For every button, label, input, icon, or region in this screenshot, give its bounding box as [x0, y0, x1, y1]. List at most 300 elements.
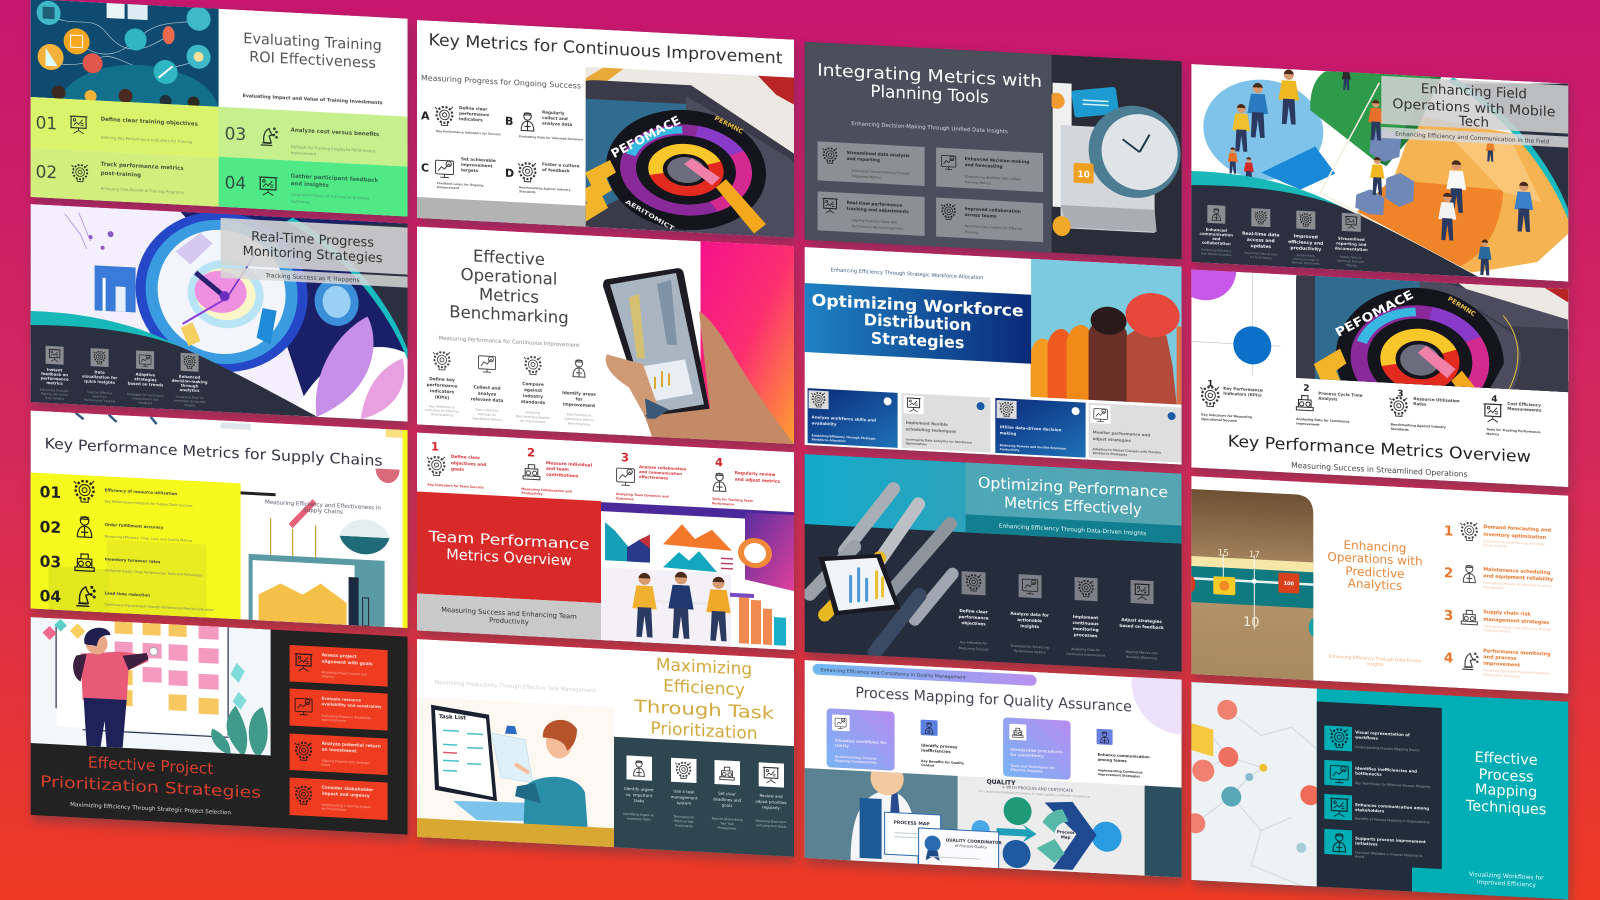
card text: Improvement: [291, 150, 317, 156]
decorative corner circle: [1132, 632, 1232, 737]
text: Analyze potential return: [322, 742, 381, 750]
dark right shape: [293, 218, 408, 354]
text: improvement: [1483, 661, 1521, 669]
icon: [941, 155, 956, 170]
label: insights: [1020, 623, 1040, 629]
text: Visual representation of: [1355, 730, 1410, 737]
text: Performance Metrics Integration: [852, 224, 903, 231]
text: Optimizing Supply Chain Efficiency Through: [1483, 624, 1551, 632]
label: Prioritization: [675, 823, 693, 828]
item D text: Foster a culture: [542, 162, 579, 168]
title: Monitoring Strategies: [243, 244, 383, 266]
icon: [1296, 395, 1313, 411]
icon: presentation board: [259, 177, 278, 196]
item C: C: [421, 161, 429, 175]
icon: [183, 356, 195, 369]
card text: and insights: [291, 181, 329, 189]
text: Streamlining Workflow with Unified: [965, 175, 1020, 181]
text: and process: [1483, 654, 1517, 662]
image: person at sticky-note board: [31, 617, 271, 755]
image: presenter with certificates and process map: PROCESS MAP: [894, 820, 930, 828]
teal top band: [805, 454, 1182, 544]
label: adjust priorities: [755, 799, 787, 805]
label: Benchmarking: [431, 412, 453, 417]
icon: [1078, 580, 1093, 597]
text: Measuring Efficiency, Time, Cost, and Quality Metrics: [105, 534, 193, 543]
text: Enhancing Efficiency Through Strategic: [812, 433, 876, 441]
item: identifies inefficiencies: [1324, 760, 1430, 790]
title: Operations with: [1327, 550, 1423, 569]
item A: [421, 106, 501, 136]
slide: Process Mapping for Quality Assurance: [805, 615, 1232, 886]
card text: Track performance metrics: [101, 162, 184, 172]
label: Continuous Improvement: [1066, 652, 1106, 658]
label: documentation: [1335, 245, 1368, 252]
icon: [720, 767, 734, 780]
text: Order fulfillment accuracy: [105, 522, 164, 530]
icon: [1330, 728, 1348, 748]
item 3: [1444, 607, 1551, 636]
dark panel: [1317, 702, 1442, 893]
item 1: [1444, 521, 1552, 551]
label: Operational Metrics: [564, 417, 594, 422]
label: Use a task: [674, 788, 695, 794]
label: Methods for: [478, 412, 497, 417]
label: Operational Metrics: [472, 416, 502, 422]
text: among teams: [1098, 757, 1127, 763]
text: Enhancing Demand Planning with Data-: [1483, 539, 1545, 546]
label: Define key: [429, 376, 455, 383]
text: Aligning Business Goals with: [852, 218, 897, 225]
title: Key Performance Metrics for Supply Chains: [45, 436, 383, 470]
label: Key Performance: [429, 404, 455, 409]
text: Indicators (KPIs): [1223, 391, 1262, 398]
card 01: [31, 97, 219, 158]
item 3: 3: [1444, 608, 1453, 624]
text: Management: [1483, 585, 1504, 590]
gray footer bar: [417, 197, 586, 227]
label: Implement: [1073, 614, 1098, 620]
text: Tools for Tracking Performance: [1486, 427, 1540, 434]
text: Avoid: [1355, 855, 1364, 859]
text: Performance monitoring: [1483, 648, 1551, 658]
item A text: indicators: [459, 116, 483, 122]
text: Assessing Project Impact and: [322, 670, 367, 676]
gauge label PERMNC: PERMNC: [713, 114, 745, 136]
step 4: [712, 455, 780, 509]
label: continuous: [1073, 620, 1099, 626]
icon: [925, 723, 933, 734]
card: collaboration: [936, 198, 1043, 242]
title: Optimizing Workforce: [812, 290, 1024, 320]
title: Evaluating Training: [243, 31, 382, 54]
wave: teal: [31, 311, 181, 347]
image: wooden timeline: [1191, 489, 1313, 680]
icon: [523, 464, 540, 480]
step 2: [471, 355, 503, 422]
text: Assess project: [322, 653, 357, 660]
item: process inefficiencies: [921, 720, 965, 769]
text: Driven Insights: [1483, 543, 1507, 548]
label: Enhanced: [1206, 227, 1227, 233]
label: monitoring: [1073, 626, 1099, 632]
text: Aligning Projects with Strategic: [322, 759, 370, 765]
timeline numbers: 10: [1243, 615, 1260, 631]
label: Communication in: [1293, 257, 1319, 262]
benefit 4: [172, 352, 208, 408]
slide: Key Performance Metrics for Supply Chains: [31, 410, 410, 634]
text: for Prioritization: [322, 807, 346, 812]
title: Planning Tools: [870, 81, 989, 107]
label: analyze: [478, 391, 496, 398]
icon: [634, 761, 644, 776]
item D text: of feedback: [542, 167, 570, 173]
text: adjust strategies: [1093, 436, 1132, 443]
label: Enhanced: [179, 374, 200, 380]
gauge label PEFOMACE: PEFOMACE: [1333, 287, 1416, 340]
gradient side panel: [700, 241, 794, 444]
card text: Long-term Impact of Training on Business: [291, 192, 369, 201]
number 02: 02: [36, 162, 57, 183]
text: Real-Time Data Insights for Effective: [965, 224, 1023, 231]
icon: bulb: [72, 164, 88, 182]
label: Tools for Streamlining: [710, 816, 743, 822]
subtitle: Productivity: [489, 616, 529, 626]
label: Insights: [184, 403, 196, 408]
text: Improvement: [1296, 421, 1320, 427]
icon: [74, 480, 94, 503]
step 4: [1119, 579, 1164, 661]
item C text: Enhancement: [437, 185, 460, 190]
title: Predictive: [1345, 564, 1405, 581]
label: standards: [521, 399, 546, 406]
metric 4: [1483, 394, 1542, 439]
title: Metrics Overview: [446, 547, 572, 570]
title: Operations with Mobile: [1392, 96, 1555, 120]
row 04: 04: [40, 587, 61, 606]
label: Important Tasks: [628, 816, 651, 822]
icon: [1389, 397, 1407, 417]
label: Strategies for Continuous: [127, 392, 164, 398]
subtitle bar: [1381, 127, 1568, 148]
item A: A: [421, 109, 430, 123]
item B text: analyze data: [542, 121, 572, 127]
text: Performance: [712, 501, 734, 507]
icon: [295, 786, 312, 805]
step 4: 4: [715, 455, 723, 469]
gauge right rim repaint: [1503, 316, 1568, 392]
label: Benchmarking: [568, 421, 590, 426]
slide: Optimizing Workforce Distribution Strategies: [805, 247, 1184, 471]
subtitle: Enhancing Efficiency Through Strategic Workforce Allocation: [831, 267, 983, 281]
title box: [1381, 76, 1568, 134]
image: hand holding phone: [603, 264, 794, 444]
label: indicators: [430, 388, 455, 395]
text: management strategies: [1483, 617, 1549, 626]
label: (KPIs): [435, 394, 449, 401]
text: Key Indicators for Team Success: [428, 483, 484, 489]
label: Business Objectives: [1126, 655, 1157, 660]
wave: dark footer: [31, 324, 318, 417]
icon: [713, 473, 726, 492]
step 3: [516, 356, 550, 424]
text: Analyze workforce skills and: [812, 414, 876, 423]
label: visualization for: [82, 373, 117, 380]
red title panel: [417, 492, 601, 603]
label: quick insights: [84, 378, 116, 385]
label: against: [524, 387, 542, 394]
row 03: 03: [40, 552, 61, 572]
text: bottlenecks: [1355, 771, 1382, 777]
item B: B: [505, 115, 513, 128]
card text: Define clear training objectives: [101, 117, 198, 128]
text: Planning Metrics: [965, 180, 991, 185]
item C text: Feedback Loops for Ongoing: [437, 181, 483, 187]
icon: [295, 742, 312, 761]
title: Strategies: [871, 328, 964, 352]
subtitle: Maximizing Productivity Through Effective Task Management: [434, 680, 596, 694]
card: data-driven decisions: [995, 398, 1086, 458]
step 2: [521, 445, 593, 499]
slide: Optimizing Performance Metrics Effectively: [805, 454, 1184, 678]
text: stakeholders: [1355, 807, 1385, 814]
title: Process: [1479, 767, 1534, 786]
icon: [1333, 833, 1346, 852]
text: Common Mistakes in Process Mapping to: [1355, 851, 1422, 858]
card 03: [219, 107, 408, 167]
image: man with task list: Task List: [439, 714, 466, 722]
title: Efficiency: [663, 676, 745, 701]
label: regularly: [762, 804, 781, 810]
right yellow strip: [403, 430, 408, 628]
label: Data Collection: [476, 408, 499, 413]
icon: team: [521, 113, 534, 131]
text: Monitor performance and: [1093, 429, 1150, 437]
label: Your Task: [720, 821, 734, 826]
card: decision making: [936, 148, 1043, 192]
step 2: 2: [527, 445, 535, 460]
label: Aligning Metrics with: [1125, 650, 1158, 655]
icon: [76, 586, 95, 607]
text: Enhanced decision-making: [965, 157, 1029, 165]
text: Supports process improvement: [1355, 836, 1426, 844]
label: Improvement and: [133, 396, 158, 402]
icon: [1330, 798, 1349, 817]
item 4: 4: [1444, 650, 1453, 667]
title: Key Metrics for Continuous Improvement: [428, 30, 783, 68]
image: presenter with certificates and process map: Map: [1061, 834, 1071, 840]
text: for consistency: [1010, 752, 1044, 758]
text: Mapping Fundamentals: [835, 759, 877, 765]
title: Optimizing Performance: [978, 474, 1168, 501]
text: and adjust metrics: [735, 477, 780, 485]
subtitle: Insights: [1366, 661, 1384, 668]
label: through: [181, 383, 199, 389]
title: Real-Time Progress: [251, 229, 374, 251]
item 2: 2: [1444, 565, 1453, 582]
pill subtitle: Enhancing Efficiency and Consistency in Quality Management: [821, 667, 966, 681]
card 04: [219, 157, 408, 217]
text: and forecasting: [965, 162, 1003, 170]
item: supports improvement: [1324, 829, 1426, 862]
text: Balancing Remote and On-Site Employee: [1000, 443, 1066, 451]
label: based on feedback: [1119, 623, 1164, 630]
item C text: targets: [461, 167, 479, 173]
label: reporting and: [1336, 241, 1367, 247]
label: industry: [523, 393, 543, 400]
text: Outcomes: [616, 496, 634, 501]
title: Enhancing: [1344, 538, 1406, 555]
row 04: [40, 584, 214, 614]
wave: dark footer: [1191, 184, 1478, 277]
slide: Real-Time Progress Monitoring Strategies: [31, 202, 410, 428]
text: Goals: [322, 763, 331, 767]
label: Effective Task: [674, 819, 694, 824]
text: Effective Mapping: [1010, 768, 1043, 773]
image: presenter with certificates and process map: For create standardized processes, to lower quality certificate compliance.: [979, 789, 1091, 799]
icon: [1212, 208, 1220, 221]
label: relevant data: [471, 396, 503, 404]
text: Predictive Models: [1483, 628, 1511, 634]
text: availability: [812, 420, 837, 427]
image: presenter with certificates and process map: QUALITY COORDINATOR: [946, 837, 1002, 845]
text: Benefits of Process Mapping in Organizations: [1355, 817, 1430, 824]
label: Performance Metrics: [1014, 649, 1046, 655]
label: Indicators for Effective: [425, 408, 459, 414]
label: Data: [94, 369, 105, 375]
item 1: 1: [1444, 523, 1453, 540]
subtitle: Enhancing Decision-Making Through Unified Data Insights: [851, 121, 1008, 135]
item C text: Set achievable: [461, 156, 496, 163]
text: Streamlined data analysis: [847, 151, 910, 159]
title: Prioritization: [650, 719, 758, 744]
icon: [1254, 211, 1266, 224]
card text: Outcomes: [291, 199, 310, 205]
icon: [48, 349, 61, 362]
gauge label AERITOMICT: AERITOMICT: [624, 199, 676, 233]
text: Enhancing Decision-Making Through: [852, 169, 910, 176]
metric 4: 4: [1491, 395, 1498, 405]
text: Tools for Tracking Team: [712, 497, 753, 503]
text: Implementing a Scoring System: [322, 803, 371, 809]
card text: Analyzing Cost-Benefit of Training Programs: [101, 186, 184, 195]
card text: Gather participant feedback: [291, 174, 378, 184]
icon: [75, 554, 94, 571]
subtitle: Measuring Progress for Ongoing Success: [421, 73, 581, 91]
icon: [478, 356, 496, 373]
title: Distribution: [864, 310, 971, 335]
image: man with task list: [417, 697, 614, 847]
text: Urgency: [322, 674, 335, 679]
text: objectives and: [451, 460, 486, 468]
row 03: [40, 552, 202, 579]
label: system: [677, 800, 691, 806]
metric 2: [1296, 383, 1363, 429]
gold band: [417, 818, 614, 847]
text: initiatives: [1355, 841, 1378, 847]
text: Define clear: [451, 455, 480, 461]
text: and communication: [639, 469, 682, 476]
text: scheduling techniques: [906, 426, 957, 434]
text: Tools and Techniques for: [1010, 764, 1055, 770]
label: Identify areas: [562, 390, 596, 398]
text: Cost Efficiency: [1507, 401, 1541, 408]
text: clarity: [835, 743, 849, 748]
text: Integrated Metrics: [852, 174, 881, 180]
text: Improved collaboration: [965, 207, 1021, 215]
label: Real-Time: [93, 394, 107, 399]
item B text: Regularly: [542, 110, 565, 116]
title: Techniques: [1465, 798, 1546, 818]
label: productivity: [1290, 245, 1321, 253]
text: making: [1000, 430, 1016, 436]
image fragments: top edge: [76, 413, 408, 438]
text: Efficiency of resource utilization: [105, 487, 177, 496]
text: Identifies inefficiencies and: [1355, 766, 1417, 774]
text: and reporting: [847, 156, 880, 164]
slide: Effective Project Prioritization Strategies: [31, 617, 410, 841]
text: Enhances communication among: [1355, 802, 1429, 811]
label: vs. important: [626, 792, 653, 798]
metric 3: 3: [1397, 389, 1404, 400]
label: Identifying Urgent vs.: [623, 812, 655, 817]
image: calendar and clock: 10: [1077, 170, 1090, 181]
text: workflows: [1355, 735, 1379, 741]
step 1: [427, 439, 486, 490]
label: Enhancing Efficiency: [1201, 248, 1232, 253]
label: Streamlining: [1297, 253, 1315, 258]
image: presenter with certificates and process map: QUALITY: [987, 778, 1016, 787]
label: Management: [717, 826, 737, 831]
title: Maximizing: [656, 655, 752, 680]
icon: board: [70, 116, 88, 134]
icon: [1345, 216, 1358, 229]
text: Rates: [1413, 401, 1427, 407]
text: Improvement Strategies: [1098, 772, 1140, 778]
label: Compare: [522, 381, 544, 388]
text: Forecasting Demand for Improved Inventory: [1483, 581, 1552, 588]
icon: [1300, 213, 1311, 227]
icon: award: [518, 162, 536, 182]
title band: [805, 283, 1031, 364]
label: collaboration: [1202, 240, 1231, 246]
label: performance: [427, 382, 458, 390]
title: Tech: [1458, 113, 1489, 131]
text: Understanding Process Mapping Basics: [1355, 745, 1420, 752]
text: Maintenance scheduling: [1483, 567, 1550, 576]
item C: [422, 157, 496, 190]
icon: [832, 714, 850, 731]
text: inventory optimization: [1483, 532, 1547, 541]
text: Metrics: [1486, 432, 1499, 437]
label: Analyzing: [526, 410, 540, 415]
image: performance gauge: [1296, 275, 1568, 392]
icon: [139, 355, 151, 367]
step 1: [959, 571, 989, 652]
step 4: [562, 359, 596, 427]
text: Understanding Process: [835, 755, 876, 761]
card: stakeholder impact: [290, 777, 388, 820]
label: Analyze data for: [1010, 611, 1050, 618]
text: Analysis: [1318, 396, 1338, 402]
icon: [1022, 579, 1038, 594]
label: Collect and: [473, 384, 501, 392]
slide: Effective Operational Metrics Benchmarking: [417, 226, 796, 450]
row 01: 01: [40, 483, 61, 502]
image: process flow nodes: [1185, 682, 1320, 887]
label: Define clear: [959, 608, 989, 615]
subtitle: Enhancing Efficiency Through Data-Driven Insights: [999, 524, 1146, 537]
